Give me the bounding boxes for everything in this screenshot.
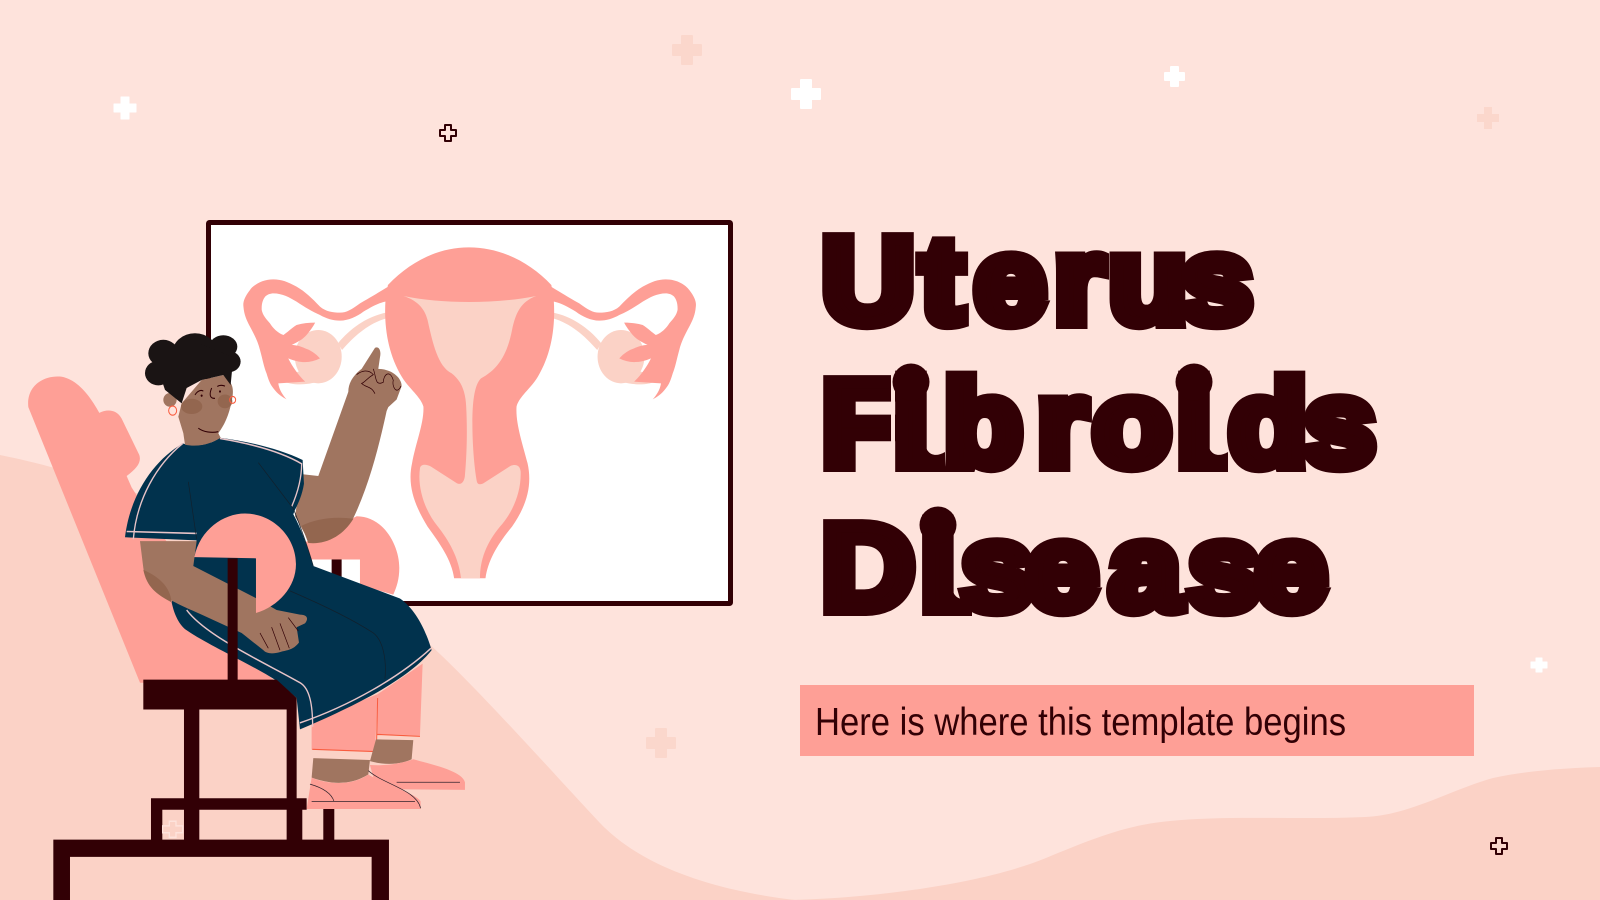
ankles (312, 739, 413, 783)
title line: Disease: Disease (821, 499, 1327, 636)
subtitle text: Here is where this template begins (815, 701, 1346, 744)
arm rest post (332, 559, 342, 579)
chair frame (53, 680, 389, 900)
raised arm pointing at the diagram (295, 347, 402, 543)
chair round armrest disc (194, 514, 296, 613)
illustration: woman seated on chair (28, 333, 465, 900)
shoes (307, 759, 465, 809)
left fallopian tube (243, 278, 402, 399)
uterine cavity (403, 296, 536, 578)
poster frame (208, 222, 730, 604)
uterus diagram (243, 247, 696, 578)
title line: Fibroids: Fibroids (821, 355, 1376, 492)
left ovary (278, 313, 386, 384)
background wave left (0, 455, 795, 900)
chair arm rest (300, 516, 399, 595)
round i dots and tails (892, 364, 1228, 616)
faint plus (163, 821, 183, 837)
panel: uterus poster (208, 222, 730, 604)
head (163, 375, 236, 446)
trousers (312, 664, 423, 752)
title (821, 212, 1376, 636)
subtitle bar (800, 685, 1474, 756)
background wave right (791, 767, 1600, 900)
resting arm and hand (140, 541, 307, 653)
chair post (228, 558, 238, 681)
chair back cushion (28, 376, 277, 683)
subtitle background (800, 685, 1474, 756)
right fallopian tube (538, 278, 696, 399)
right ovary (553, 313, 662, 384)
gap between F arms and i (891, 368, 895, 474)
uterus body (385, 247, 554, 578)
hair (145, 333, 241, 403)
title line: Uterus: Uterus (821, 212, 1253, 349)
dress (125, 438, 432, 729)
